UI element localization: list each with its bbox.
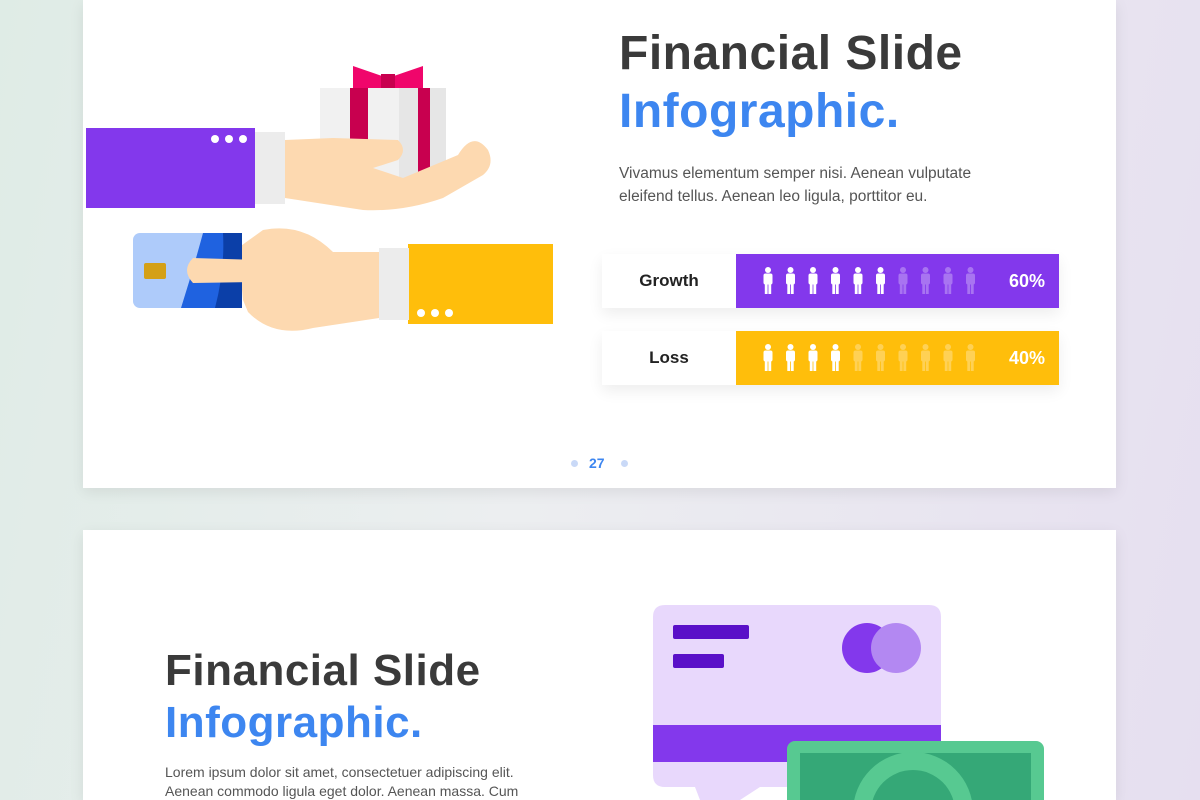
loss row bbox=[602, 331, 1059, 385]
loss bar bbox=[736, 331, 1059, 385]
growth row bbox=[602, 254, 1059, 308]
loss row: Loss bbox=[649, 348, 689, 367]
illustration: hands exchanging gift and card bbox=[86, 66, 553, 331]
growth bar: 60% bbox=[1009, 271, 1045, 291]
description bbox=[619, 165, 971, 205]
page number bbox=[571, 455, 628, 471]
growth row: Growth bbox=[639, 271, 699, 290]
title 2: Financial Slide bbox=[165, 646, 481, 695]
yellow sleeve arm with card bbox=[133, 228, 553, 331]
gift box bbox=[320, 66, 446, 178]
loss bar: 40% bbox=[1009, 348, 1045, 368]
description: Vivamus elementum semper nisi. Aenean vulputate bbox=[619, 165, 971, 182]
subtitle 2: Infographic. bbox=[165, 698, 423, 747]
description: eleifend tellus. Aenean leo ligula, porttitor eu. bbox=[619, 188, 928, 205]
description 2: Lorem ipsum dolor sit amet, consectetuer adipiscing elit. bbox=[165, 764, 514, 780]
title: Financial Slide bbox=[619, 27, 963, 80]
subtitle: Infographic. bbox=[619, 85, 900, 138]
slide 1 card bbox=[83, 0, 1116, 488]
page number: 27 bbox=[589, 455, 605, 471]
description 2: Aenean commodo ligula eget dolor. Aenean massa. Cum bbox=[165, 783, 518, 799]
illustration: credit card and cash bbox=[653, 605, 1044, 800]
purple sleeve arm bbox=[86, 128, 491, 210]
growth bar bbox=[736, 254, 1059, 308]
description 2 bbox=[165, 764, 518, 799]
slide 2 card bbox=[83, 530, 1116, 800]
